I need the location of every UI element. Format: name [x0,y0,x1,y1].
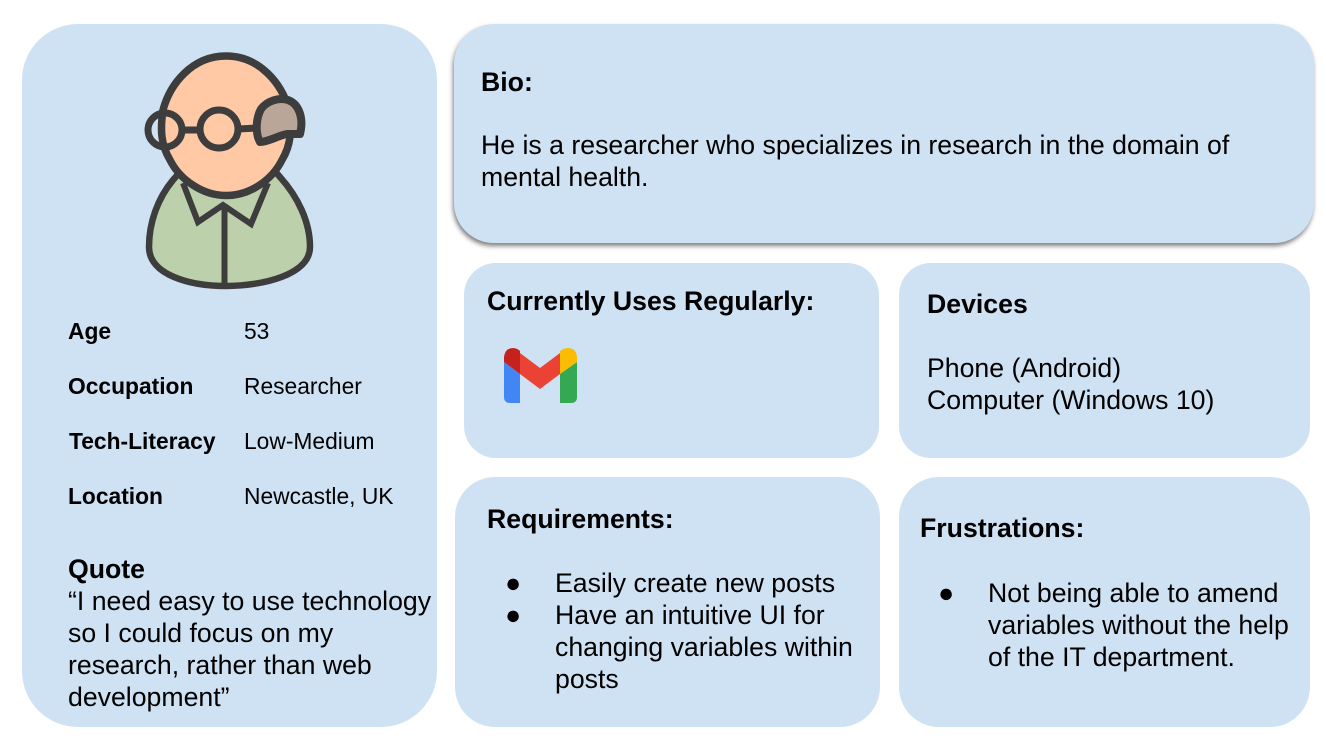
quote: Quote [68,554,145,584]
bio text: mental health. [481,162,648,192]
requirements heading: Requirements: [487,504,674,534]
frustrations heading: Frustrations: [920,513,1084,543]
bio heading: Bio: [481,67,533,97]
bio text [481,130,1230,192]
icon: Gmail [504,348,577,403]
avatar head [161,56,291,196]
avatar glasses [148,110,258,148]
panel: bio [454,24,1314,243]
icon: avatar of older man with glasses [144,52,314,290]
panel: devices [899,263,1310,458]
quote: “I need easy to use technology [68,586,431,616]
requirements list: ● [505,568,521,598]
panel: currently uses [464,263,879,458]
frustrations list: variables without the help [988,610,1289,640]
quote [68,554,431,712]
panel: frustrations [899,477,1310,727]
requirements list [505,568,853,694]
requirements list: changing variables within [555,632,853,662]
requirements list: ● [505,600,521,630]
bio text: He is a researcher who specializes in research in the domain of [481,130,1229,160]
requirements list: posts [555,664,619,694]
profile facts: 53 [244,318,269,344]
frustrations list: Not being able to amend [988,578,1278,608]
avatar hair [257,99,301,142]
panel: profile [22,24,437,727]
quote: so I could focus on my [68,618,333,648]
frustrations list: of the IT department. [988,642,1235,672]
profile facts: Location [68,483,163,509]
devices list [927,353,1214,415]
quote: development” [68,682,230,712]
profile facts: Occupation [68,373,193,399]
profile facts: Low-Medium [244,428,374,454]
devices list: Phone (Android) [927,353,1121,383]
frustrations list: ● [938,578,954,608]
profile facts: Tech-Literacy [69,428,216,454]
currently uses heading: Currently Uses Regularly: [487,286,814,316]
requirements list: Have an intuitive UI for [555,600,825,630]
devices heading: Devices [927,289,1028,319]
frustrations list [938,578,1289,672]
profile facts: Researcher [244,373,362,399]
avatar body [149,170,310,287]
profile facts: Newcastle, UK [244,483,394,509]
quote: research, rather than web [68,650,372,680]
requirements list: Easily create new posts [555,568,835,598]
profile facts [68,318,394,509]
devices list: Computer (Windows 10) [927,385,1214,415]
profile facts: Age [68,318,111,344]
panel: requirements [455,477,880,727]
